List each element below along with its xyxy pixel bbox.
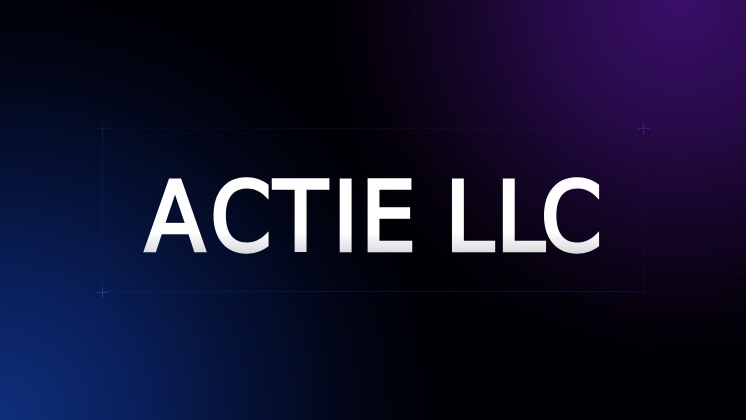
frame: corner crosses and faint lines (97, 123, 650, 298)
title: ACTIE LLC (145, 161, 602, 273)
